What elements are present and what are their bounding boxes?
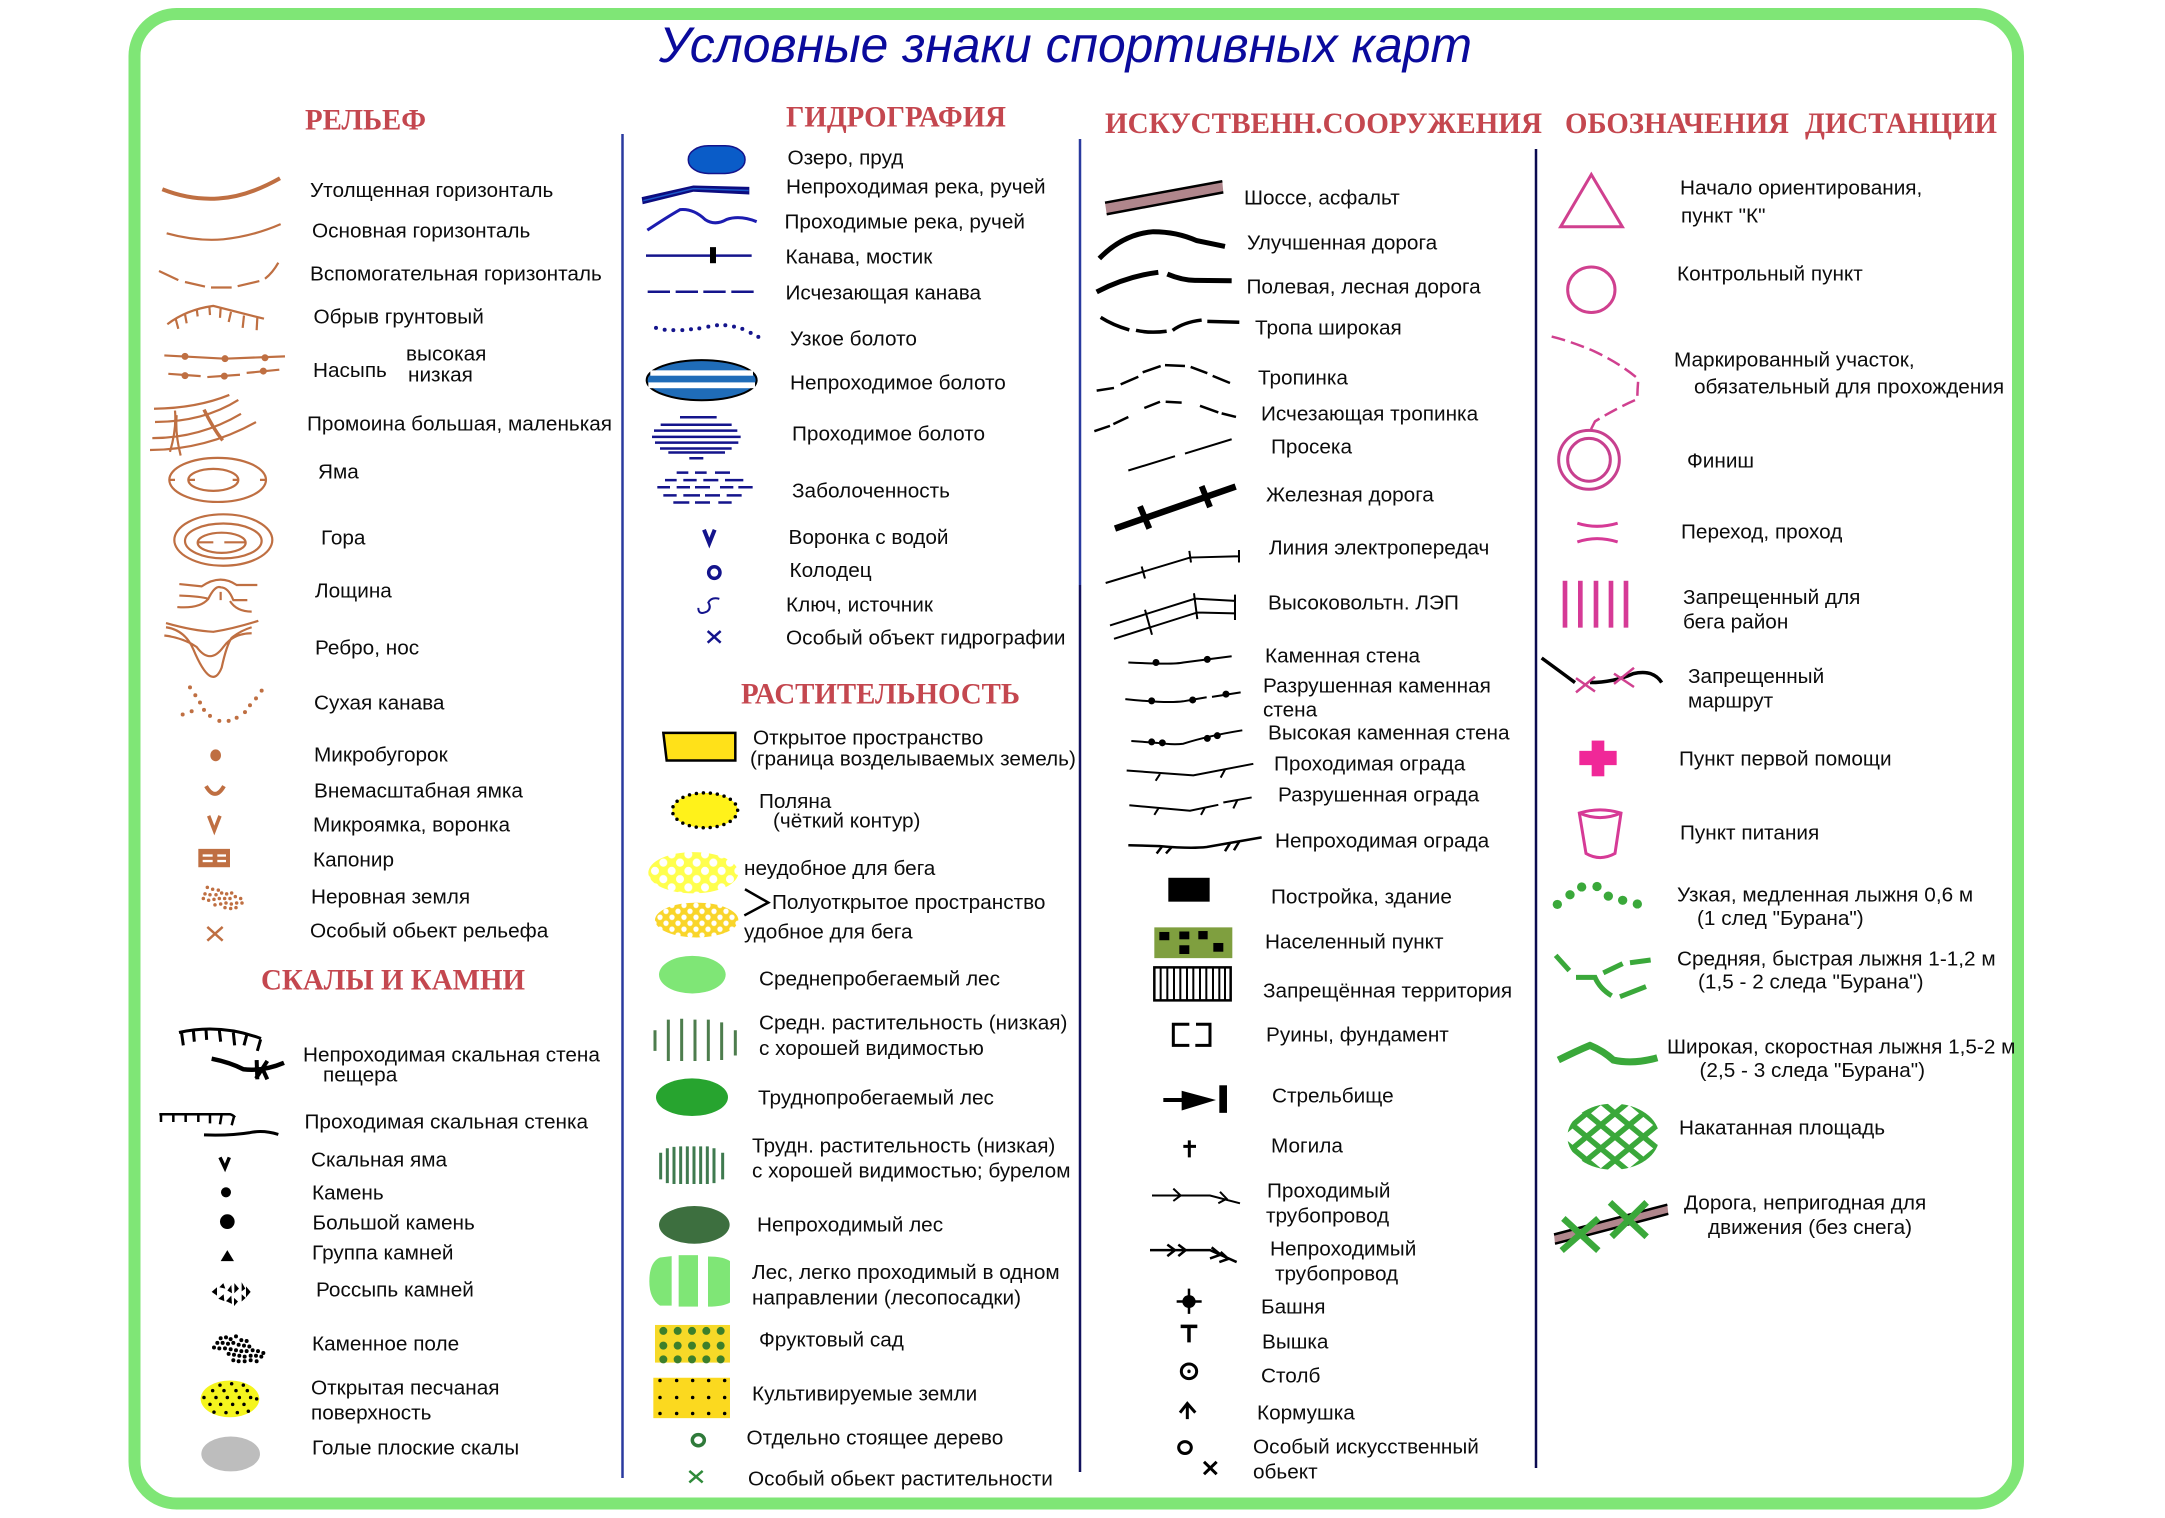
label: Непроходимая река, ручей [786,175,1046,198]
label: Воронка с водой [788,526,949,549]
label: Ребро, нос [315,636,419,659]
icon: forest runnable in one direction [649,1255,730,1307]
icon: building [1168,878,1210,902]
label: Насыпь [313,359,387,382]
icon: earth bank [167,306,264,330]
label: Полуоткрытое пространство [772,891,1045,914]
label: Исчезающая канава [786,281,982,304]
icon: open sandy ground [201,1381,259,1417]
label: Переход, проход [1681,520,1842,543]
label: Столб [1261,1364,1320,1387]
panel: vegetation [648,677,1076,1490]
label: Руины, фундамент [1266,1023,1449,1046]
label: с хорошей видимостью [759,1037,984,1060]
label: Гора [321,526,366,549]
label: Основная горизонталь [312,219,530,242]
label: Лощина [315,579,392,602]
label: Озеро, пруд [788,146,903,169]
icon: cultivated land [653,1378,730,1418]
icon: knoll [210,749,221,761]
title: Условные знаки спортивных карт [658,17,1472,73]
label: трубопровод [1275,1262,1398,1285]
icon: grave [1183,1140,1196,1157]
label: Исчезающая тропинка [1261,402,1479,425]
icon: railway [1115,486,1236,529]
icon: crossable fence [1127,764,1253,781]
heading: relief: РЕЛЬЕФ [305,103,426,136]
label: Фруктовый сад [759,1328,904,1351]
icon: embankment [164,355,285,377]
label: Средн. растительность (низкая) [759,1011,1067,1034]
label: обязательный для прохождения [1694,375,2004,398]
label: Проходимое болото [792,422,985,445]
label: Узкое болото [790,327,917,350]
label: Запрещенный для [1683,586,1860,609]
label: Непроходимый [1270,1237,1416,1260]
label: Большой камень [312,1211,475,1234]
label: Среднепробегаемый лес [759,967,1000,990]
icon: boulder [221,1187,231,1197]
label: Пункт первой помощи [1679,747,1892,770]
label: Шоссе, асфальт [1244,186,1400,209]
icon: dense undergrowth [661,1146,723,1184]
icon: first aid cross [1579,741,1617,776]
label: Отдельно стоящее дерево [746,1426,1003,1449]
icon: single tree [692,1435,704,1446]
label: Средняя, быстрая лыжня 1-1,2 м [1677,947,1996,970]
icon: difficult run forest [656,1078,728,1116]
icon: cairn [1181,1364,1197,1379]
label: Разрушенная ограда [1278,783,1480,806]
icon: special man-made object [1179,1442,1217,1474]
label: Улучшенная дорога [1247,231,1438,254]
label: Капонир [313,848,394,871]
label: Разрушенная каменная [1263,674,1491,697]
heading: rocks and stones: СКАЛЫ И КАМНИ [261,963,525,996]
heading: vegetation: РАСТИТЕЛЬНОСТЬ [741,677,1020,710]
icon: hill [174,514,272,566]
label: Просека [1271,435,1352,458]
icon: bracket [744,889,768,915]
icon: impassable fence [1128,837,1262,853]
icon: small depression [206,786,224,794]
label: движения (без снега) [1708,1216,1912,1239]
icon: lake [688,146,745,173]
icon: narrow ski trail [1553,882,1642,909]
icon: highway [1105,181,1223,214]
label: Канава, мостик [786,245,933,268]
icon: refreshment cup [1579,810,1621,858]
icon: wide track [1101,317,1239,332]
label: (граница возделываемых земель) [750,747,1076,770]
icon: water-filled pit [704,530,715,543]
icon: special relief object [207,927,223,941]
label: Проходимая скальная стенка [304,1110,589,1133]
label: Особый обьект рельефа [310,919,549,942]
label: Ключ, источник [786,593,934,616]
icon: vanishing path [1094,402,1236,431]
icon: main contour [167,224,281,240]
icon: passable cliff [159,1114,278,1135]
icon: wide ski trail [1558,1045,1657,1062]
label: (чёткий контур) [773,809,920,832]
label: Постройка, здание [1271,885,1452,908]
column divider 3 [1535,149,1537,1468]
label: Тропинка [1258,366,1348,389]
label: Лес, легко проходимый в одном [752,1261,1060,1284]
icon: path [1097,365,1230,391]
label: бега район [1683,610,1788,633]
label: Особый обьект растительности [748,1467,1053,1490]
label: удобное для бега [744,920,913,943]
icon: runnable semi-open land [655,903,738,937]
icon: impassable cliff with cave [179,1029,284,1079]
label: Линия электропередач [1269,536,1489,559]
label: Железная дорога [1266,483,1434,506]
label: Открытая песчаная [311,1376,500,1399]
panel: rocks and stones [159,963,600,1471]
label: Каменное поле [312,1332,459,1355]
label: пункт "К" [1681,204,1765,227]
icon: ride [1128,439,1232,471]
label: Проходимый [1267,1179,1390,1202]
label: низкая [408,363,473,386]
icon: gully [150,395,256,456]
icon: special vegetation object [689,1471,703,1482]
label: Труднопробегаемый лес [758,1086,994,1109]
label: маршрут [1688,689,1774,712]
label: Населенный пункт [1265,930,1444,953]
column divider 1 [621,134,624,1478]
label: Группа камней [312,1241,453,1264]
icon: re-entrant [177,580,257,612]
label: Камень [312,1181,384,1204]
label: Запрещенный [1688,665,1824,688]
icon: settlement [1154,927,1232,958]
label: Яма [318,460,359,483]
label: Контрольный пункт [1677,262,1863,285]
label: Высокая каменная стена [1268,721,1510,744]
icon: impassable pipeline [1150,1245,1237,1262]
label: Непроходимая ограда [1275,829,1490,852]
label: Проходимая ограда [1274,752,1466,775]
panel: man-made features [1094,107,1542,1483]
icon: ruined fence [1129,797,1252,815]
label: Культивируемые земли [752,1382,977,1405]
icon: large boulder [220,1214,235,1229]
label: Утолщенная горизонталь [310,179,553,202]
label: направлении (лесопосадки) [752,1286,1021,1309]
icon: impassable forest [659,1206,730,1244]
label: (1 след "Бурана") [1697,907,1864,930]
label: (1,5 - 2 следа "Бурана") [1698,970,1924,993]
label: Обрыв грунтовый [314,305,484,328]
icon: rocky pit [220,1157,229,1168]
label: Пункт питания [1680,821,1819,844]
icon: special water object [708,631,721,643]
icon: start triangle [1561,175,1622,227]
label: неудобное для бега [744,857,936,880]
label: обьект [1253,1460,1318,1483]
label: поверхность [311,1401,431,1424]
heading: hydrography: ГИДРОГРАФИЯ [786,100,1006,133]
label: Проходимые река, ручей [784,210,1025,233]
label: Непроходимый лес [757,1213,943,1236]
icon: ditch with bridge [646,247,752,263]
label: Накатанная площадь [1679,1116,1885,1139]
icon: medium ski trail [1556,955,1651,997]
label: Промоина большая, маленькая [307,412,612,435]
label: Внемасштабная ямка [314,779,523,802]
icon: pit [169,458,266,502]
label: Кормушка [1257,1401,1355,1424]
label: Непроходимая скальная стена [303,1043,600,1066]
icon: gun pit [198,849,230,867]
label: Открытое пространство [753,726,983,749]
label: (2,5 - 3 следа "Бурана") [1700,1059,1925,1082]
icon: thick contour [162,178,280,199]
icon: undergrowth good visibility [655,1019,735,1061]
icon: high stone wall [1131,730,1242,744]
label: пещера [323,1063,398,1086]
icon: boulder group [221,1250,234,1261]
heading: course symbols: ДИСТАНЦИИ [1805,107,1997,140]
label: Особый искусственный [1253,1435,1479,1458]
label: трубопровод [1266,1204,1389,1227]
label: Башня [1261,1295,1326,1318]
label: с хорошей видимостью; бурелом [752,1159,1070,1182]
label: Тропа широкая [1255,316,1402,339]
icon: fodder rack [1180,1403,1195,1419]
label: стена [1263,698,1318,721]
label: Трудн. растительность (низкая) [752,1134,1055,1157]
icon: bare rock [201,1437,260,1471]
icon: forest road [1097,272,1232,292]
icon: improved road [1099,232,1225,258]
icon: slow run forest [659,956,726,993]
icon: clearing [672,793,738,828]
icon: crossable pipeline [1152,1189,1240,1203]
icon: road unfit for skiing [1554,1202,1668,1251]
label: Запрещённая территория [1263,979,1512,1002]
label: Стрельбище [1272,1084,1394,1107]
label: Финиш [1687,449,1754,472]
icon: firing range [1163,1085,1227,1113]
icon: finish circles [1559,430,1619,489]
heading: man-made features: ИСКУСТВЕНН.СООРУЖЕНИЯ [1105,107,1542,140]
label: Полевая, лесная дорога [1246,275,1481,298]
icon: ruined stone wall [1125,692,1241,702]
icon: ruin [1173,1024,1210,1045]
heading: course symbols: ОБОЗНАЧЕНИЯ [1565,107,1789,140]
icon: control circle [1568,267,1615,312]
icon: forbidden route [1542,658,1662,692]
icon: broken ground [203,887,242,909]
label: Поляна [759,790,832,813]
label: Узкая, медленная лыжня 0,6 м [1677,883,1973,906]
label: Широкая, скоростная лыжня 1,5-2 м [1667,1035,2015,1058]
label: Могила [1271,1134,1343,1157]
icon: out of bounds area [1154,967,1231,1000]
icon: well [709,567,720,578]
panel: hydrography [642,100,1066,649]
label: Особый объект гидрографии [786,626,1066,649]
icon: spur [164,621,258,677]
icon: crossable river [647,209,757,230]
icon: dry ditch [183,687,262,721]
label: Россыпь камней [316,1278,474,1301]
icon: orchard [655,1325,730,1363]
icon: tower [1177,1289,1202,1314]
icon: high stand [1181,1326,1197,1342]
icon: marked route [1552,337,1638,433]
label: высокая [406,342,486,365]
label: Голые плоские скалы [312,1436,519,1459]
icon: narrow marsh [656,325,758,337]
label: Начало ориентирования, [1680,176,1922,199]
label: Неровная земля [311,885,470,908]
label: Заболоченность [792,479,950,502]
icon: micro pit [209,816,220,831]
icon: impassable river [642,186,749,204]
label: Каменная стена [1265,644,1421,667]
icon: crossable marsh [652,417,741,458]
label: Скальная яма [311,1148,447,1171]
icon: vanishing ditch [648,291,754,293]
column divider 2 [1079,139,1081,585]
heading: course symbols [1565,107,1997,140]
label: Колодец [790,559,872,582]
label: Сухая канава [314,691,445,714]
label: Высоковольтн. ЛЭП [1268,591,1459,614]
icon: power line [1106,550,1239,583]
icon: stony ground [214,1336,263,1361]
label: Микроямка, воронка [313,813,511,836]
icon: impassable marsh [647,360,757,400]
label: Вышка [1262,1330,1329,1353]
panel: course symbols [1508,107,2015,1251]
panel: relief [150,103,612,942]
icon: crossing point [1577,523,1618,542]
label: Микробугорок [314,743,449,766]
icon: indistinct marsh [657,473,753,502]
icon: auxiliary contour [159,263,278,288]
label: Дорога, непригодная для [1684,1191,1926,1214]
icon: boulder field [212,1282,251,1306]
icon: stone wall [1128,656,1232,664]
icon: groomed area [1568,1104,1658,1170]
icon: out of bounds stripes [1563,581,1628,628]
icon: rough semi-open land [648,852,738,893]
icon: open land [663,733,735,760]
icon: high-voltage line [1110,593,1235,639]
label: Маркированный участок, [1674,348,1915,371]
label: Вспомогательная горизонталь [310,262,602,285]
icon: spring [698,598,719,613]
column divider 2 lower [1079,585,1081,1472]
label: Непроходимое болото [790,371,1006,394]
